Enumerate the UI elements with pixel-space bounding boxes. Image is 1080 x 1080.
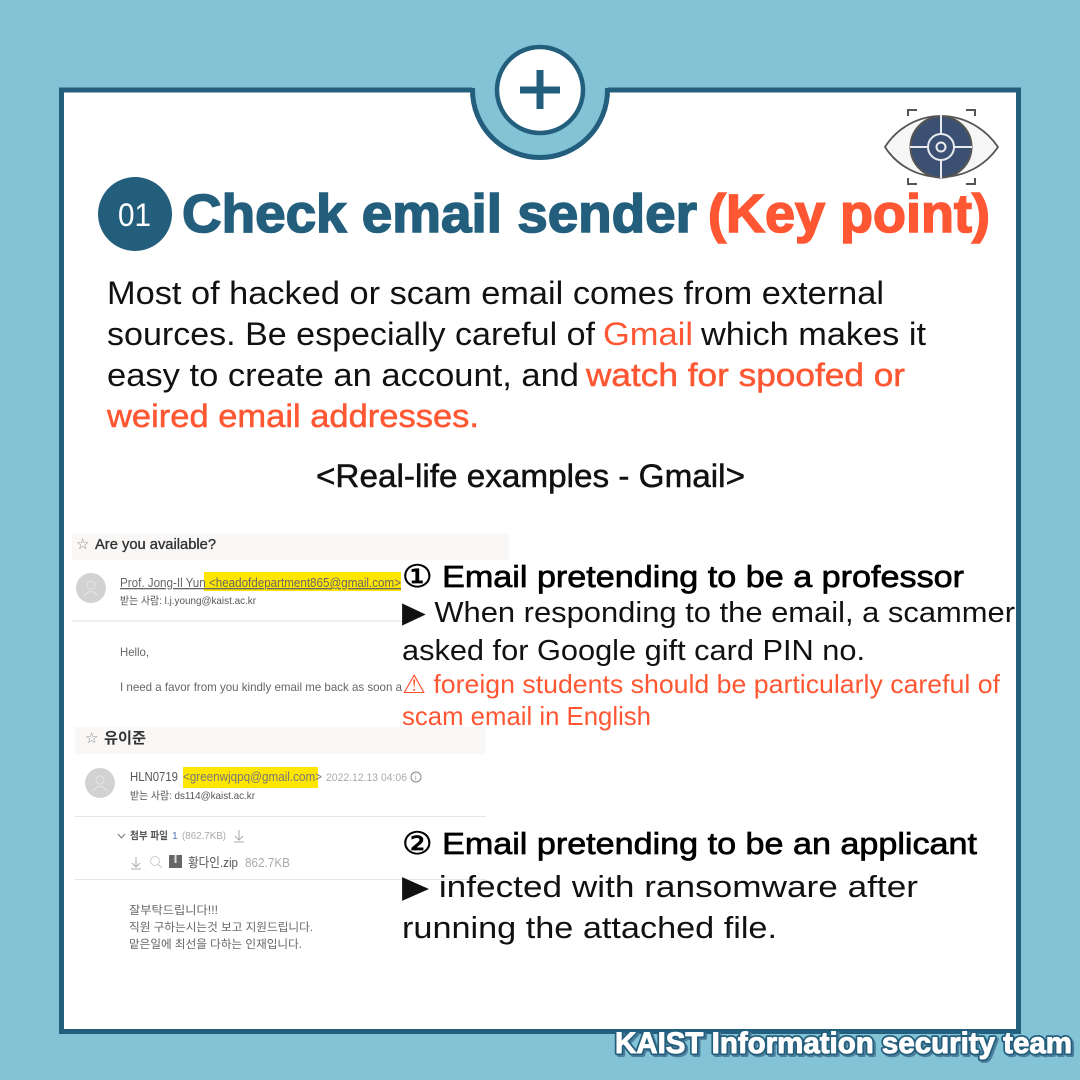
screenshot: applicant email: <greenwjqpq@gmail.com> <box>183 769 322 784</box>
plus badge <box>472 47 608 158</box>
intro paragraph: sources. Be especially careful of <box>107 316 595 352</box>
badge circle <box>497 47 583 133</box>
screenshot: professor email: Are you available? <box>95 536 216 553</box>
number badge <box>98 177 172 251</box>
intro paragraph: watch for spoofed or <box>585 357 905 393</box>
screenshot: applicant email: 2022.12.13 04:06 <box>326 772 407 784</box>
screenshot: applicant email: 862.7KB <box>245 856 290 870</box>
example 1 description <box>402 559 1016 731</box>
screenshot: professor email: I need a favor from you kindly email me back as soon a <box>120 680 402 694</box>
badge notch <box>472 85 608 158</box>
screenshot: applicant email: 황다인.zip <box>188 855 238 870</box>
key point: (Key point) <box>708 184 990 244</box>
intro paragraph: which makes it <box>700 316 926 352</box>
screenshot: applicant email: HLN0719 <box>130 769 178 784</box>
screenshot: professor email: 받는 사람: l.j.young@kaist.ac.kr <box>120 594 256 607</box>
screenshot: applicant email: 맡은일에 최선을 다하는 인재입니다. <box>129 937 302 951</box>
example 1 description: ▶ When responding to the email, a scammer <box>402 597 1015 629</box>
footer credit: KAIST Information security team <box>615 1027 1072 1060</box>
example 2 description <box>402 826 977 945</box>
screenshot: professor email <box>72 533 509 694</box>
intro paragraph: easy to create an account, and <box>107 357 579 393</box>
footer credit: KAIST Information security team <box>615 1027 1072 1060</box>
screenshot: applicant email: ☆ <box>85 730 98 747</box>
screenshot: applicant email: 1 <box>172 830 178 842</box>
intro paragraph: Gmail <box>603 316 693 352</box>
screenshot: professor email: ☆ <box>76 536 89 553</box>
screenshot: applicant email: 첨부 파일 <box>130 829 168 842</box>
panel: white framed card <box>62 90 1018 1032</box>
number: 01 <box>118 197 151 233</box>
screenshot: professor email: Hello, <box>120 645 149 659</box>
examples subheading: <Real-life examples - Gmail> <box>316 458 745 494</box>
title text: Check email sender <box>182 184 697 244</box>
notch outline <box>472 88 608 158</box>
intro paragraph: weired email addresses. <box>106 398 479 434</box>
intro paragraph <box>106 275 926 434</box>
icon: eye with target <box>885 110 998 184</box>
example 2 description: ② Email pretending to be an applicant <box>402 826 977 861</box>
footer credit: KAIST Information security team <box>617 1029 1074 1062</box>
screenshot: applicant email: 직원 구하는시는것 보고 지원드립니다. <box>129 920 313 934</box>
example 1 description: scam email in English <box>402 701 651 731</box>
screenshot: applicant email: i <box>415 775 417 782</box>
screenshot: applicant email: 받는 사람: ds114@kaist.ac.kr <box>130 789 255 802</box>
intro paragraph: Most of hacked or scam email comes from external <box>107 275 884 311</box>
example 1 description: asked for Google gift card PIN no. <box>402 635 865 667</box>
screenshot: applicant email: 유이준 <box>104 730 146 747</box>
screenshot: professor email: Prof. Jong-Il Yun <headofdepartment865@gmail.com> <box>120 575 401 590</box>
example 2 description: ▶ infected with ransomware after <box>402 869 918 904</box>
example 1 description: ① Email pretending to be a professor <box>402 559 964 594</box>
example 2 description: running the attached file. <box>402 910 777 945</box>
screenshot: applicant email <box>75 727 486 951</box>
screenshot: applicant email: (862.7KB) <box>182 830 226 842</box>
heading <box>98 177 990 251</box>
example 1 description: ⚠ foreign students should be particularly careful of <box>402 669 1001 699</box>
icon: plus <box>520 70 560 109</box>
screenshot: applicant email: 잘부탁드립니다!!! <box>129 903 218 917</box>
